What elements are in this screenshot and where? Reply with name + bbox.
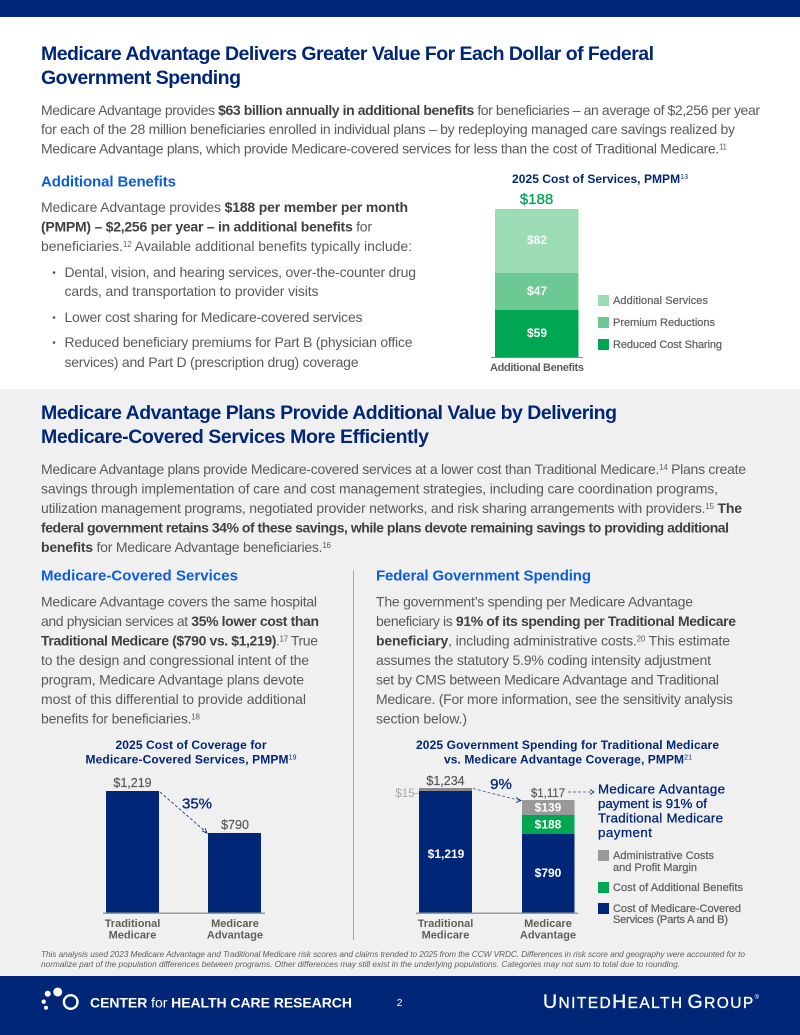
additional benefits paragraph: beneficiaries. (41, 238, 123, 254)
callout: 91% of traditional medicare payment (598, 782, 725, 840)
bullet list of additional benefits: services) and Part D (prescription drug) coverage (64, 354, 359, 370)
panel: medicare-covered services: benefits for beneficiaries. (41, 710, 192, 726)
chart: cost of coverage: 2025 Cost of Coverage for (116, 738, 267, 752)
chart: cost of coverage: Medicare (211, 918, 259, 930)
panel: medicare-covered services: Medicare-Covered Services (41, 568, 238, 584)
chart: government spending: Advantage (520, 930, 576, 942)
panel: federal government spending: 20 (637, 634, 646, 644)
legend: Administrative Costs (613, 850, 714, 862)
intro paragraph: 11 (719, 143, 728, 152)
section paragraph: 14 (659, 463, 668, 472)
additional benefits paragraph: 12 (123, 240, 132, 249)
logo: unitedhealth group: UNITEDHEALTH GROUP (543, 991, 753, 1013)
section paragraph: Medicare Advantage plans provide Medicare-covered services at a lower cost than Traditional Medicare. (41, 461, 659, 477)
bullet list of additional benefits: Lower cost sharing for Medicare-covered services (64, 309, 362, 325)
legend: Cost of Additional Benefits (613, 882, 744, 894)
title: delivering services more efficiently: Medicare-Covered Services More Efficiently (41, 426, 429, 448)
panel: medicare-covered services: program, Medicare Advantage plans devote (41, 672, 304, 688)
panel: medicare-covered services: 18 (191, 712, 201, 722)
chart: 2025 cost of services: $82 (527, 233, 547, 247)
chart: government spending: Medicare (524, 918, 572, 930)
callout: 91% of traditional medicare payment: Traditional Medicare (598, 810, 723, 826)
chart: cost of coverage: Medicare-Covered Services, PMPM (86, 752, 288, 766)
chart: government spending: 2025 Government Spending for Traditional Medicare (416, 738, 719, 752)
legend: and Profit Margin (613, 862, 697, 874)
footer bar (0, 976, 800, 1035)
additional benefits paragraph: Medicare Advantage provides $188 per member per month (41, 199, 408, 215)
heading: additional benefits: Additional Benefits (41, 174, 176, 190)
chart: government spending: vs. Medicare Advantage Coverage, PMPM (444, 752, 684, 766)
title: value for federal spending: Government Spending (41, 67, 241, 89)
callout: 91% of traditional medicare payment: payment is 91% of (598, 796, 707, 811)
panel: federal government spending (376, 568, 736, 726)
title: value for federal spending (41, 43, 654, 89)
section paragraph: Plans create (668, 461, 746, 477)
section paragraph: 15 (705, 502, 715, 511)
title: value for federal spending: Medicare Advantage Delivers Greater Value For Each Dollar of Federal (41, 43, 654, 65)
footer label: center for health care research: CENTER for HEALTH CARE RESEARCH (90, 995, 352, 1011)
callout: 91% of traditional medicare payment: payment (598, 825, 652, 840)
page number: 2 (397, 997, 403, 1009)
title: delivering services more efficiently: Medicare Advantage Plans Provide Additional Value by Delivering (41, 402, 617, 424)
chart: government spending: $15 (395, 788, 415, 800)
panel: medicare-covered services (41, 568, 319, 726)
panel: medicare-covered services: Traditional Medicare ($790 vs. $1,219). (41, 632, 280, 648)
chart: government spending: $790 (535, 866, 562, 880)
chart: 2025 cost of services: 13 (680, 174, 688, 181)
bullet list of additional benefits: cards, and transportation to provider visits (64, 283, 318, 299)
panel: federal government spending: assumes the statutory 5.9% coding intensity adjustment (376, 652, 711, 668)
intro paragraph: Medicare Advantage plans, which provide Medicare-covered services for less than the cost of Traditional Medicare. (41, 141, 719, 157)
chart: government spending: $1,234 (426, 774, 465, 788)
additional benefits paragraph: Available additional benefits typically include: (132, 238, 412, 254)
panel: federal government spending: beneficiary is 91% of its spending per Traditional Medicare (376, 613, 736, 629)
chart: cost of coverage: $790 (221, 818, 249, 832)
section paragraph: The (714, 500, 742, 516)
bullet list of additional benefits (53, 264, 416, 370)
callout: 91% of traditional medicare payment: Medicare Advantage (598, 782, 725, 796)
panel: federal government spending: set by CMS between Medicare Advantage and Traditional (376, 672, 719, 688)
legend (598, 850, 744, 926)
gray section background (0, 389, 800, 976)
panel: federal government spending: The government’s spending per Medicare Advantage (376, 594, 693, 610)
chart: cost of coverage: Traditional (105, 918, 160, 930)
bullet list of additional benefits: Dental, vision, and hearing services, over-the-counter drug (64, 264, 416, 280)
chart: government spending (395, 738, 744, 942)
section paragraph: utilization management programs, negotiated provider networks, and risk sharing arrangements with providers. (41, 500, 706, 516)
panel: medicare-covered services: 17 (280, 634, 289, 644)
chart: 2025 cost of services: Reduced Cost Sharing (613, 339, 722, 351)
panel: federal government spending: This estimate (645, 632, 730, 648)
section paragraph (41, 461, 746, 555)
icon: center logo (42, 988, 78, 1010)
additional benefits paragraph (41, 199, 412, 254)
panel: medicare-covered services: most of this differential to provide additional (41, 691, 306, 707)
chart: 2025 cost of services: Additional Services (613, 295, 708, 307)
top bar (0, 0, 800, 17)
panel: medicare-covered services: True (288, 632, 318, 648)
chart: 2025 cost of services (490, 172, 722, 374)
legend: Services (Parts A and B) (613, 914, 728, 926)
chart: 2025 cost of services: Additional Benefits (490, 362, 584, 374)
footnote: normalize part of the population differences between programs. Other differences may still exist in the underlying populations. Categories may not sum to total due to rounding. (41, 959, 680, 969)
intro paragraph: for each of the 28 million beneficiaries enrolled in individual plans – by redeploying managed care savings realized by (41, 121, 735, 137)
chart: 2025 cost of services: $59 (527, 326, 547, 340)
section paragraph: federal government retains 34% of these savings, while plans devote remaining savings to providing additional (41, 520, 729, 536)
panel: medicare-covered services: Medicare Advantage covers the same hospital (41, 594, 317, 610)
footnote: This analysis used 2023 Medicare Advantage and Traditional Medicare risk scores and claims trended to 2025 from the CCW VRDC. Differences in risk score and geography were accounted for to (41, 949, 745, 959)
chart: cost of coverage (86, 738, 297, 942)
chart: government spending: $139 (535, 800, 562, 814)
intro paragraph: Medicare Advantage provides $63 billion annually in additional benefits for beneficiaries – an average of $2,256 per year (41, 102, 760, 118)
chart: cost of coverage: Advantage (207, 930, 263, 942)
legend: Cost of Medicare-Covered (613, 903, 741, 915)
chart: government spending: 21 (684, 754, 692, 762)
chart: government spending: Medicare (422, 930, 469, 942)
chart: government spending: Traditional (418, 918, 473, 930)
title: delivering services more efficiently (41, 402, 617, 448)
panel: federal government spending: Federal Government Spending (376, 568, 591, 584)
chart: cost of coverage: 35% (182, 796, 212, 812)
additional benefits paragraph: (PMPM) – $2,256 per year – in additional benefits for (41, 218, 372, 234)
panel: federal government spending: section below.) (376, 710, 467, 726)
panel: federal government spending: beneficiary, including administrative costs. (376, 632, 637, 648)
logo: unitedhealth group: ® (755, 994, 760, 1001)
chart: 2025 cost of services: $47 (527, 284, 547, 298)
chart: 2025 cost of services: $188 (520, 191, 553, 208)
chart: cost of coverage: 19 (289, 754, 297, 762)
chart: government spending: 9% (490, 776, 512, 793)
section paragraph: benefits for Medicare Advantage beneficiaries. (41, 539, 323, 555)
panel: medicare-covered services: and physician services at 35% lower cost than (41, 613, 319, 629)
panel: medicare-covered services: to the design and congressional intent of the (41, 652, 309, 668)
column divider (353, 570, 354, 940)
intro paragraph (41, 102, 760, 157)
section paragraph: savings through implementation of care and cost management strategies, including care coordination programs, (41, 480, 718, 496)
chart: 2025 cost of services: Premium Reductions (613, 317, 716, 329)
chart: 2025 cost of services: 2025 Cost of Services, PMPM (512, 172, 680, 186)
chart: cost of coverage: $1,219 (113, 776, 152, 790)
footnote (41, 949, 745, 969)
chart: cost of coverage: Medicare (109, 930, 156, 942)
chart: government spending: $1,117 (531, 788, 565, 800)
panel: federal government spending: Medicare. (For more information, see the sensitivity analysis (376, 691, 733, 707)
chart: government spending: $1,219 (428, 847, 465, 861)
chart: government spending: $188 (535, 818, 562, 832)
bullet list of additional benefits: Reduced beneficiary premiums for Part B (physician office (64, 334, 413, 350)
section paragraph: 16 (322, 541, 332, 550)
